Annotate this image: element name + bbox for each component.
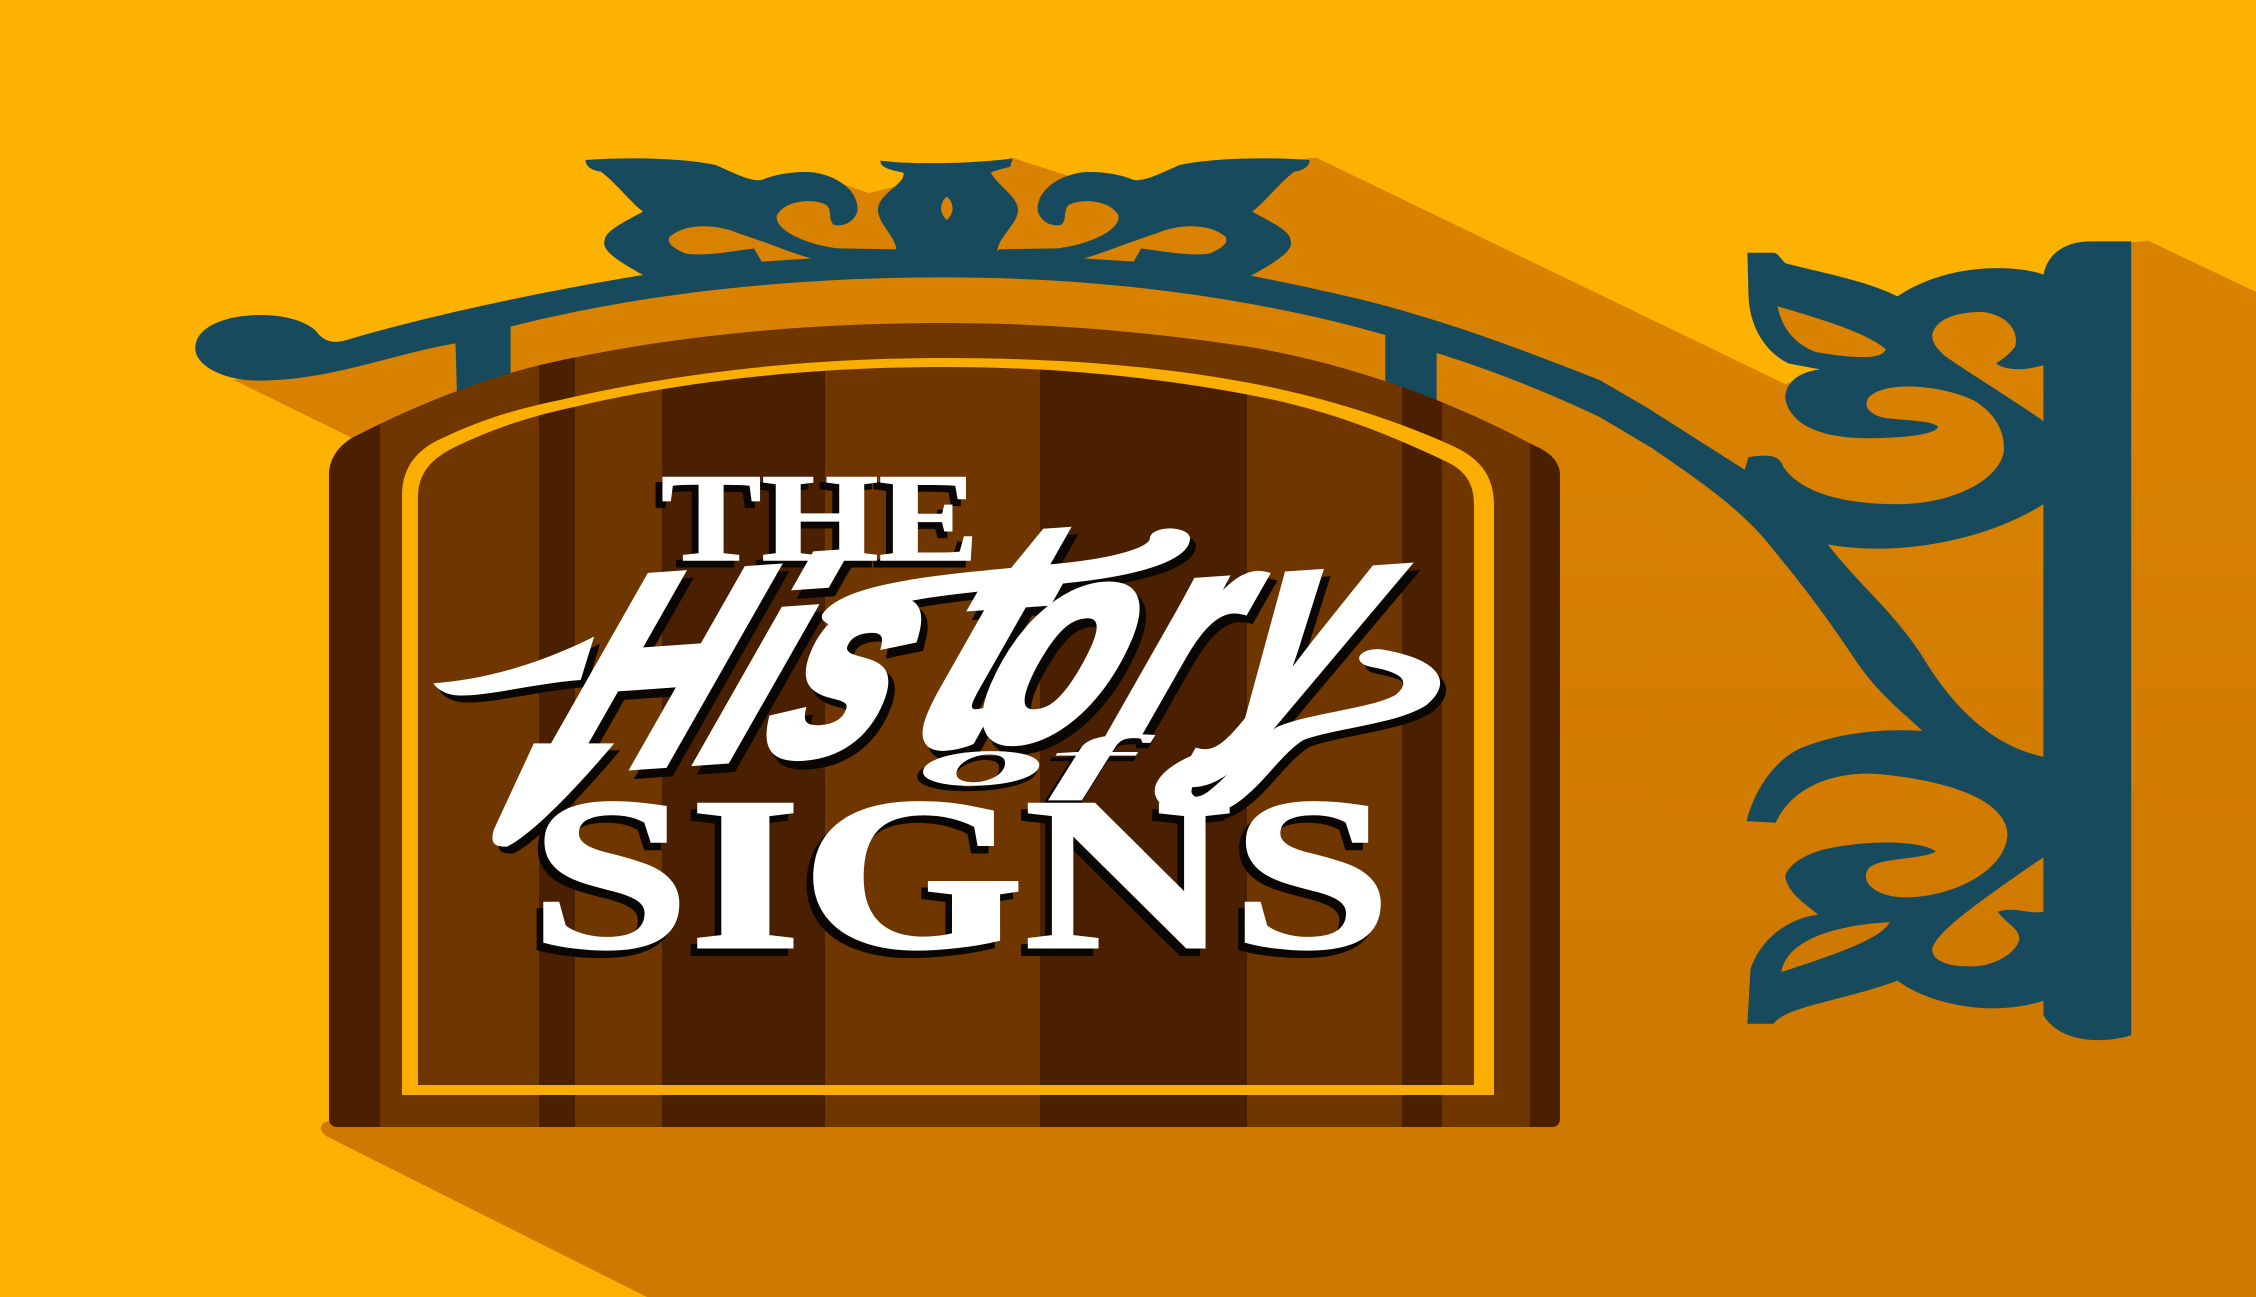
- title text: History: r: [1083, 473, 1309, 791]
- title text: History: s: [729, 496, 981, 816]
- title shadow: s: [735, 504, 987, 824]
- title flourishes: [433, 538, 1422, 847]
- title text: History: H: [510, 508, 804, 831]
- title shadow: H: [516, 516, 810, 839]
- title shadow: r: [1089, 481, 1315, 799]
- ornament: left wing: [586, 158, 915, 280]
- long cast shadow: [234, 158, 2256, 1297]
- title shadow: SIGNS: [524, 761, 1385, 1002]
- title shadow: THE: [655, 455, 973, 594]
- title shadow: of: [915, 726, 1152, 806]
- sign support rail: [195, 263, 1650, 447]
- title text: History: i: [669, 504, 866, 820]
- board: dark centre planks: [662, 320, 1247, 1130]
- ornament: right wing: [981, 158, 1310, 280]
- title shadow: [439, 434, 1473, 1002]
- title shadow: o: [944, 489, 1208, 809]
- wooden sign board: [329, 320, 1560, 1130]
- bracket: scrollwork: [1650, 253, 2060, 1024]
- board: gold frame: [402, 358, 1494, 1095]
- bracket: wall post: [2043, 241, 2131, 1040]
- crown ornament: [586, 158, 1310, 280]
- title text: of: of: [919, 721, 1156, 801]
- title text: SIGNS: SIGNS: [530, 754, 1391, 995]
- title text: History: t: [874, 450, 1119, 815]
- ornament: centre vase: [878, 158, 1018, 277]
- board: plank base: [329, 323, 1560, 1127]
- board: dark edge planks: [329, 320, 1560, 1130]
- title shadow: y: [1183, 471, 1458, 794]
- title shadow: t: [880, 458, 1125, 823]
- title text: History: o: [938, 481, 1202, 801]
- wall bracket: [1650, 241, 2131, 1040]
- title text: THE: THE: [661, 449, 979, 588]
- title lettering: [433, 426, 1473, 1002]
- title shadow: i: [675, 512, 872, 828]
- title text: History: y: [1177, 463, 1452, 786]
